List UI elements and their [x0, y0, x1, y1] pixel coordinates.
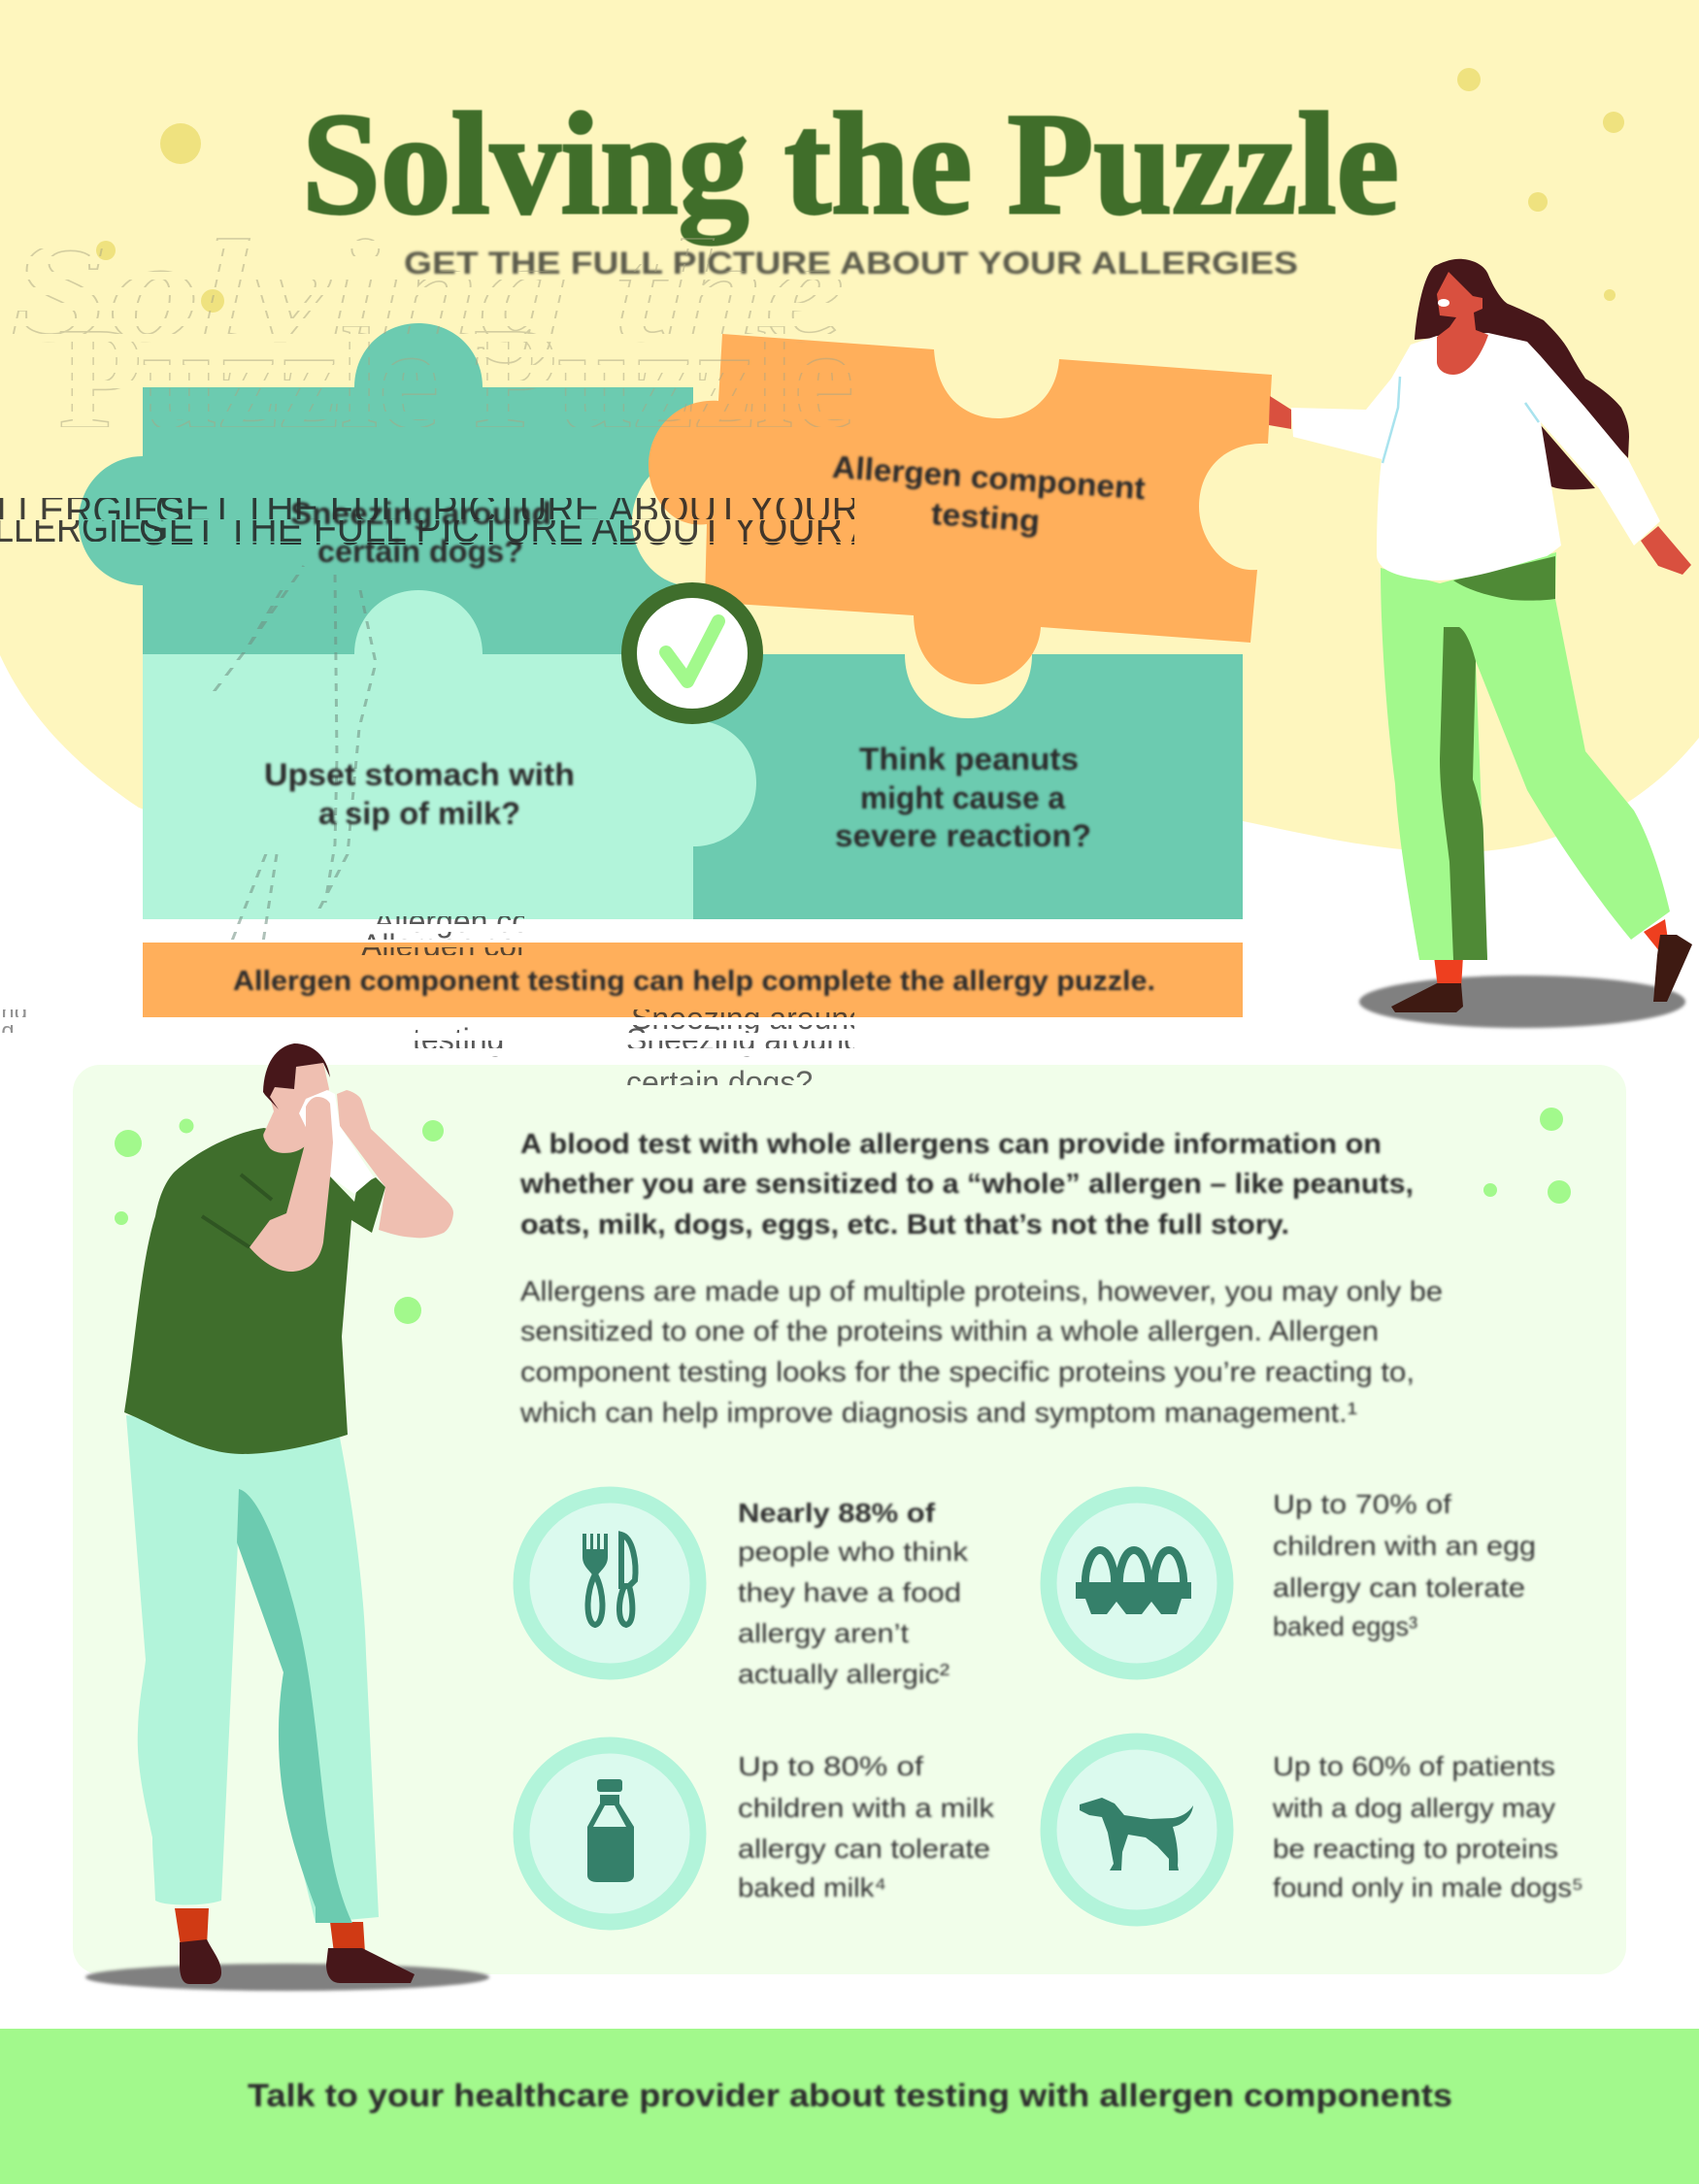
- panel dots: [115, 1108, 1571, 1324]
- ghost subtitle lines: GET THE FULL PICTURE ABOUT YOUR A: [155, 485, 893, 531]
- ghost fragments under banner: testing: [413, 1022, 504, 1057]
- ghost fragments under banner: Allergen component: [361, 928, 638, 963]
- puzzle label: upset stomach: a sip of milk?: [318, 796, 520, 831]
- puzzle label: sneezing: Sneezing around: [290, 496, 551, 531]
- text block: whole allergens: A blood test with whole allergens can provide information on: [520, 1129, 1382, 1160]
- woman's smile: [1438, 299, 1449, 307]
- stat: milk allergy: baked milk⁴: [738, 1872, 886, 1903]
- stat: food allergy: Nearly 88% of: [738, 1498, 936, 1528]
- text block: allergen components: Allergens are made up of multiple proteins, however, you may only be: [520, 1276, 1443, 1307]
- footer band: [0, 2029, 1699, 2184]
- ghost fragments under banner: [361, 916, 854, 1056]
- puzzle label: peanuts: Think peanuts: [859, 742, 1079, 777]
- icon: dog: [1049, 1741, 1225, 1918]
- stat: food allergy: actually allergic²: [738, 1659, 949, 1689]
- icon: fork and knife: [521, 1495, 698, 1671]
- ghost title slices: Puzzle Puzzle: [58, 298, 854, 459]
- puzzle: mint piece bottom left: [143, 590, 756, 919]
- ghost fragments under banner: Allergen component: [374, 904, 650, 939]
- background: cream blob: [0, 0, 1699, 852]
- text block: whole allergens: oats, milk, dogs, eggs, etc. But that’s not the full story.: [520, 1209, 1289, 1241]
- stat: food allergy: they have a food: [738, 1577, 961, 1607]
- ghost fragment over panel: certain dogs?: [626, 1065, 813, 1100]
- puzzle label: upset stomach: Upset stomach with: [264, 757, 575, 792]
- puzzle label: allergen component testing: testing: [930, 496, 1041, 539]
- stat: milk allergy: allergy can tolerate: [738, 1834, 990, 1864]
- puzzle: orange piece top right: [649, 334, 1272, 684]
- stat: milk allergy: children with a milk: [738, 1793, 995, 1823]
- ghost subtitle lines: [0, 498, 854, 546]
- puzzle: teal piece top left: [79, 323, 693, 654]
- stat: egg allergy: [1273, 1489, 1536, 1641]
- stat: dog allergy: with a dog allergy may: [1272, 1793, 1555, 1823]
- text block: whole allergens: whether you are sensitized to a “whole” allergen – like peanuts,: [519, 1169, 1414, 1200]
- puzzle: teal piece bottom right: [693, 654, 1243, 919]
- puzzle label: sneezing: [290, 496, 551, 569]
- text block: whole allergens: [519, 1129, 1414, 1241]
- banner text: Allergen component testing can help complete the allergy puzzle.: [233, 966, 1155, 997]
- text block: allergen components: sensitized to one of the proteins within a whole allergen. Allergen: [520, 1316, 1379, 1347]
- subtitle: GET THE FULL PICTURE ABOUT YOUR ALLERGIES: [404, 246, 1298, 281]
- ghost subtitle lines: GET THE FULL PICTURE ABOUT YOUR A: [139, 505, 877, 550]
- illustration: sneezing man: [85, 1043, 489, 1991]
- icon: egg carton: [1049, 1495, 1225, 1671]
- orange banner: [143, 943, 1243, 1017]
- text block: allergen components: [519, 1276, 1443, 1429]
- stat: dog allergy: be reacting to proteins: [1273, 1834, 1558, 1864]
- puzzle label: allergen component testing: [828, 449, 1147, 546]
- stat: food allergy: people who think: [738, 1537, 969, 1567]
- ghost title slices: [12, 238, 851, 427]
- stat: milk allergy: Up to 80% of: [738, 1751, 923, 1781]
- stat: food allergy: [738, 1498, 969, 1689]
- check badge: [629, 590, 755, 716]
- puzzle label: allergen component testing: Allergen component: [831, 449, 1147, 506]
- illustration: woman holding puzzle piece: [1269, 259, 1692, 1028]
- stat: egg allergy: allergy can tolerate: [1273, 1572, 1525, 1603]
- text block: allergen components: which can help improve diagnosis and symptom management.¹: [519, 1398, 1357, 1429]
- title: Solving the Puzzle: [302, 83, 1399, 245]
- stat: egg allergy: children with an egg: [1273, 1531, 1536, 1561]
- ghost title slices: Solving the: [10, 211, 845, 372]
- footer text: Talk to your healthcare provider about testing with allergen components: [248, 2077, 1452, 2113]
- puzzle label: peanuts: severe reaction?: [835, 818, 1091, 853]
- stat: dog allergy: Up to 60% of patients: [1273, 1751, 1555, 1781]
- ghost subtitle lines: GET THE FULL PICTURE ABOUT YOUR A: [139, 508, 877, 553]
- stat: egg allergy: Up to 70% of: [1273, 1489, 1451, 1519]
- ghost fragments under banner: Sneezing around: [626, 1022, 861, 1057]
- stat: egg allergy: baked eggs³: [1273, 1611, 1417, 1641]
- stat: food allergy: allergy aren’t: [738, 1618, 909, 1648]
- puzzle label: sneezing: certain dogs?: [317, 534, 523, 569]
- stat: milk allergy: [738, 1751, 995, 1903]
- stat: dog allergy: [1272, 1751, 1583, 1903]
- icon: milk bottle: [521, 1745, 698, 1922]
- puzzle label: peanuts: [835, 742, 1091, 853]
- text block: allergen components: component testing looks for the specific proteins you’re reacting to,: [520, 1357, 1415, 1388]
- ghost fragments under banner: Sneezing around: [631, 1001, 866, 1036]
- ghost figure slices: [214, 566, 376, 971]
- stat: dog allergy: found only in male dogs⁵: [1273, 1872, 1583, 1903]
- puzzle label: peanuts: might cause a: [860, 780, 1065, 815]
- ghost fragment at left edge: [2, 1009, 25, 1033]
- puzzle label: upset stomach: [264, 757, 575, 831]
- yellow dots: [96, 68, 1624, 313]
- panel: info card: [73, 1065, 1626, 1974]
